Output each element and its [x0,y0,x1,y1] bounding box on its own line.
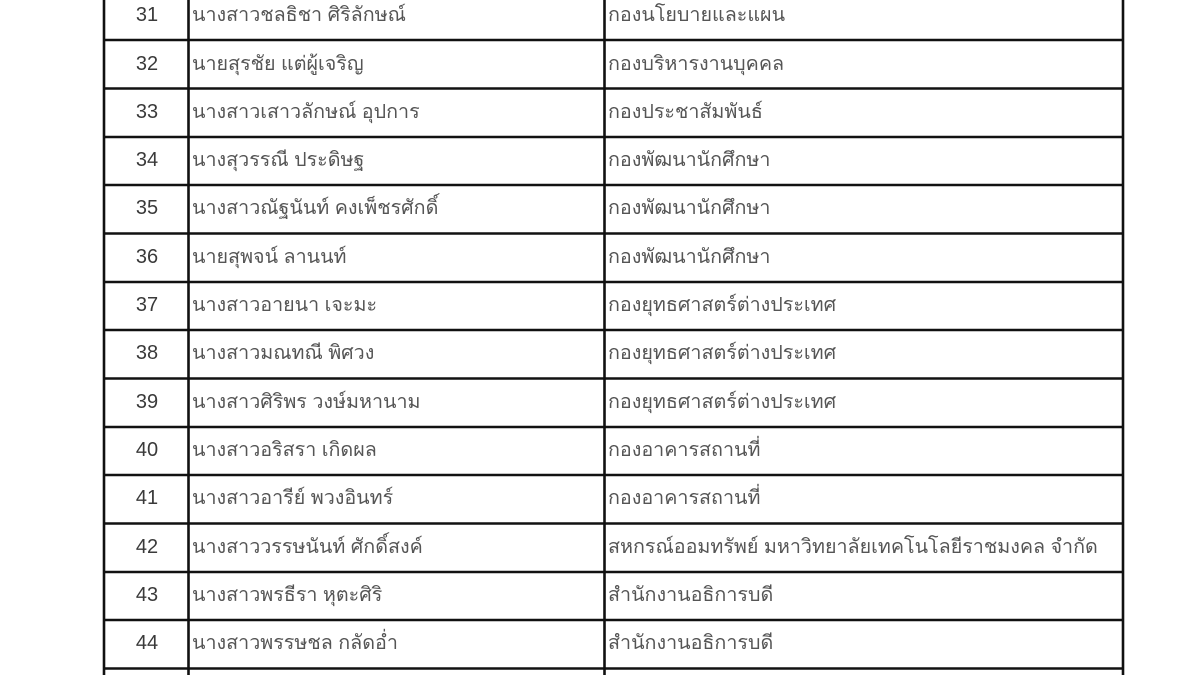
row 40: กองอาคารสถานที่ [608,436,760,461]
row 39 [136,390,837,414]
row 33: นางสาวเสาวลักษณ์ อุปการ [192,100,420,124]
row 41 [136,484,760,509]
row 33: 33 [136,101,158,123]
row 38 [136,341,837,365]
row 34: กองพัฒนานักศึกษา [608,149,770,171]
row 37: นางสาวอายนา เจะมะ [192,294,377,316]
row 32 [136,53,784,76]
row 36: กองพัฒนานักศึกษา [608,246,770,268]
row 37: กองยุทธศาสตร์ต่างประเทศ [608,293,837,317]
row 39: 39 [136,391,158,413]
row 32: นายสุรชัย แต่ผู้เจริญ [192,53,364,76]
row 40: 40 [136,439,158,461]
row 32: กองบริหารงานบุคคล [608,53,784,76]
row 41: กองอาคารสถานที่ [608,484,760,509]
row 44: สำนักงานอธิการบดี [608,632,773,654]
row 43: สำนักงานอธิการบดี [608,584,773,606]
row 39: นางสาวศิริพร วงษ์มหานาม [192,390,420,413]
row 41: 41 [136,487,158,509]
row 35 [136,193,770,219]
row 40 [136,436,760,461]
row 43: 43 [136,584,158,606]
row 31: 31 [136,4,158,26]
row 42: สหกรณ์ออมทรัพย์ มหาวิทยาลัยเทคโนโลยีราชมงคล จำกัด [608,535,1098,558]
row 44: นางสาวพรรษชล กลัดอ่ำ [192,629,398,654]
row 34: นางสุวรรณี ประดิษฐ [192,149,364,172]
row 36 [136,245,770,269]
row 42 [136,532,1098,558]
row 35: กองพัฒนานักศึกษา [608,197,770,219]
row 36: 36 [136,246,158,268]
row 33 [136,100,763,124]
row 34 [136,149,770,172]
row 38: กองยุทธศาสตร์ต่างประเทศ [608,341,837,365]
row 39: กองยุทธศาสตร์ต่างประเทศ [608,390,837,414]
row 35: นางสาวณัฐนันท์ คงเพ็ชรศักดิ์ [192,193,440,219]
row 33: กองประชาสัมพันธ์ [608,100,763,123]
row 31: นางสาวชลธิชา ศิริลักษณ์ [192,3,406,26]
row 44 [136,629,773,654]
row 32: 32 [136,53,158,75]
row 37 [136,293,837,317]
row 35: 35 [136,197,158,219]
row 31: กองนโยบายและแผน [608,3,785,26]
row 34: 34 [136,149,158,171]
row 36: นายสุพจน์ ลานนท์ [192,245,347,269]
row 43: นางสาวพรธีรา หุตะศิริ [192,584,382,607]
row 42: 42 [136,536,158,558]
row 38: 38 [136,342,158,364]
row 42: นางสาววรรษนันท์ ศักดิ์สงค์ [192,532,423,558]
row 38: นางสาวมณทณี พิศวง [192,342,374,364]
row 44: 44 [136,632,158,654]
row 37: 37 [136,294,158,316]
row 41: นางสาวอารีย์ พวงอินทร์ [192,486,393,509]
row 43 [136,584,773,607]
row 31 [136,3,785,26]
row 40: นางสาวอริสรา เกิดผล [192,439,377,461]
